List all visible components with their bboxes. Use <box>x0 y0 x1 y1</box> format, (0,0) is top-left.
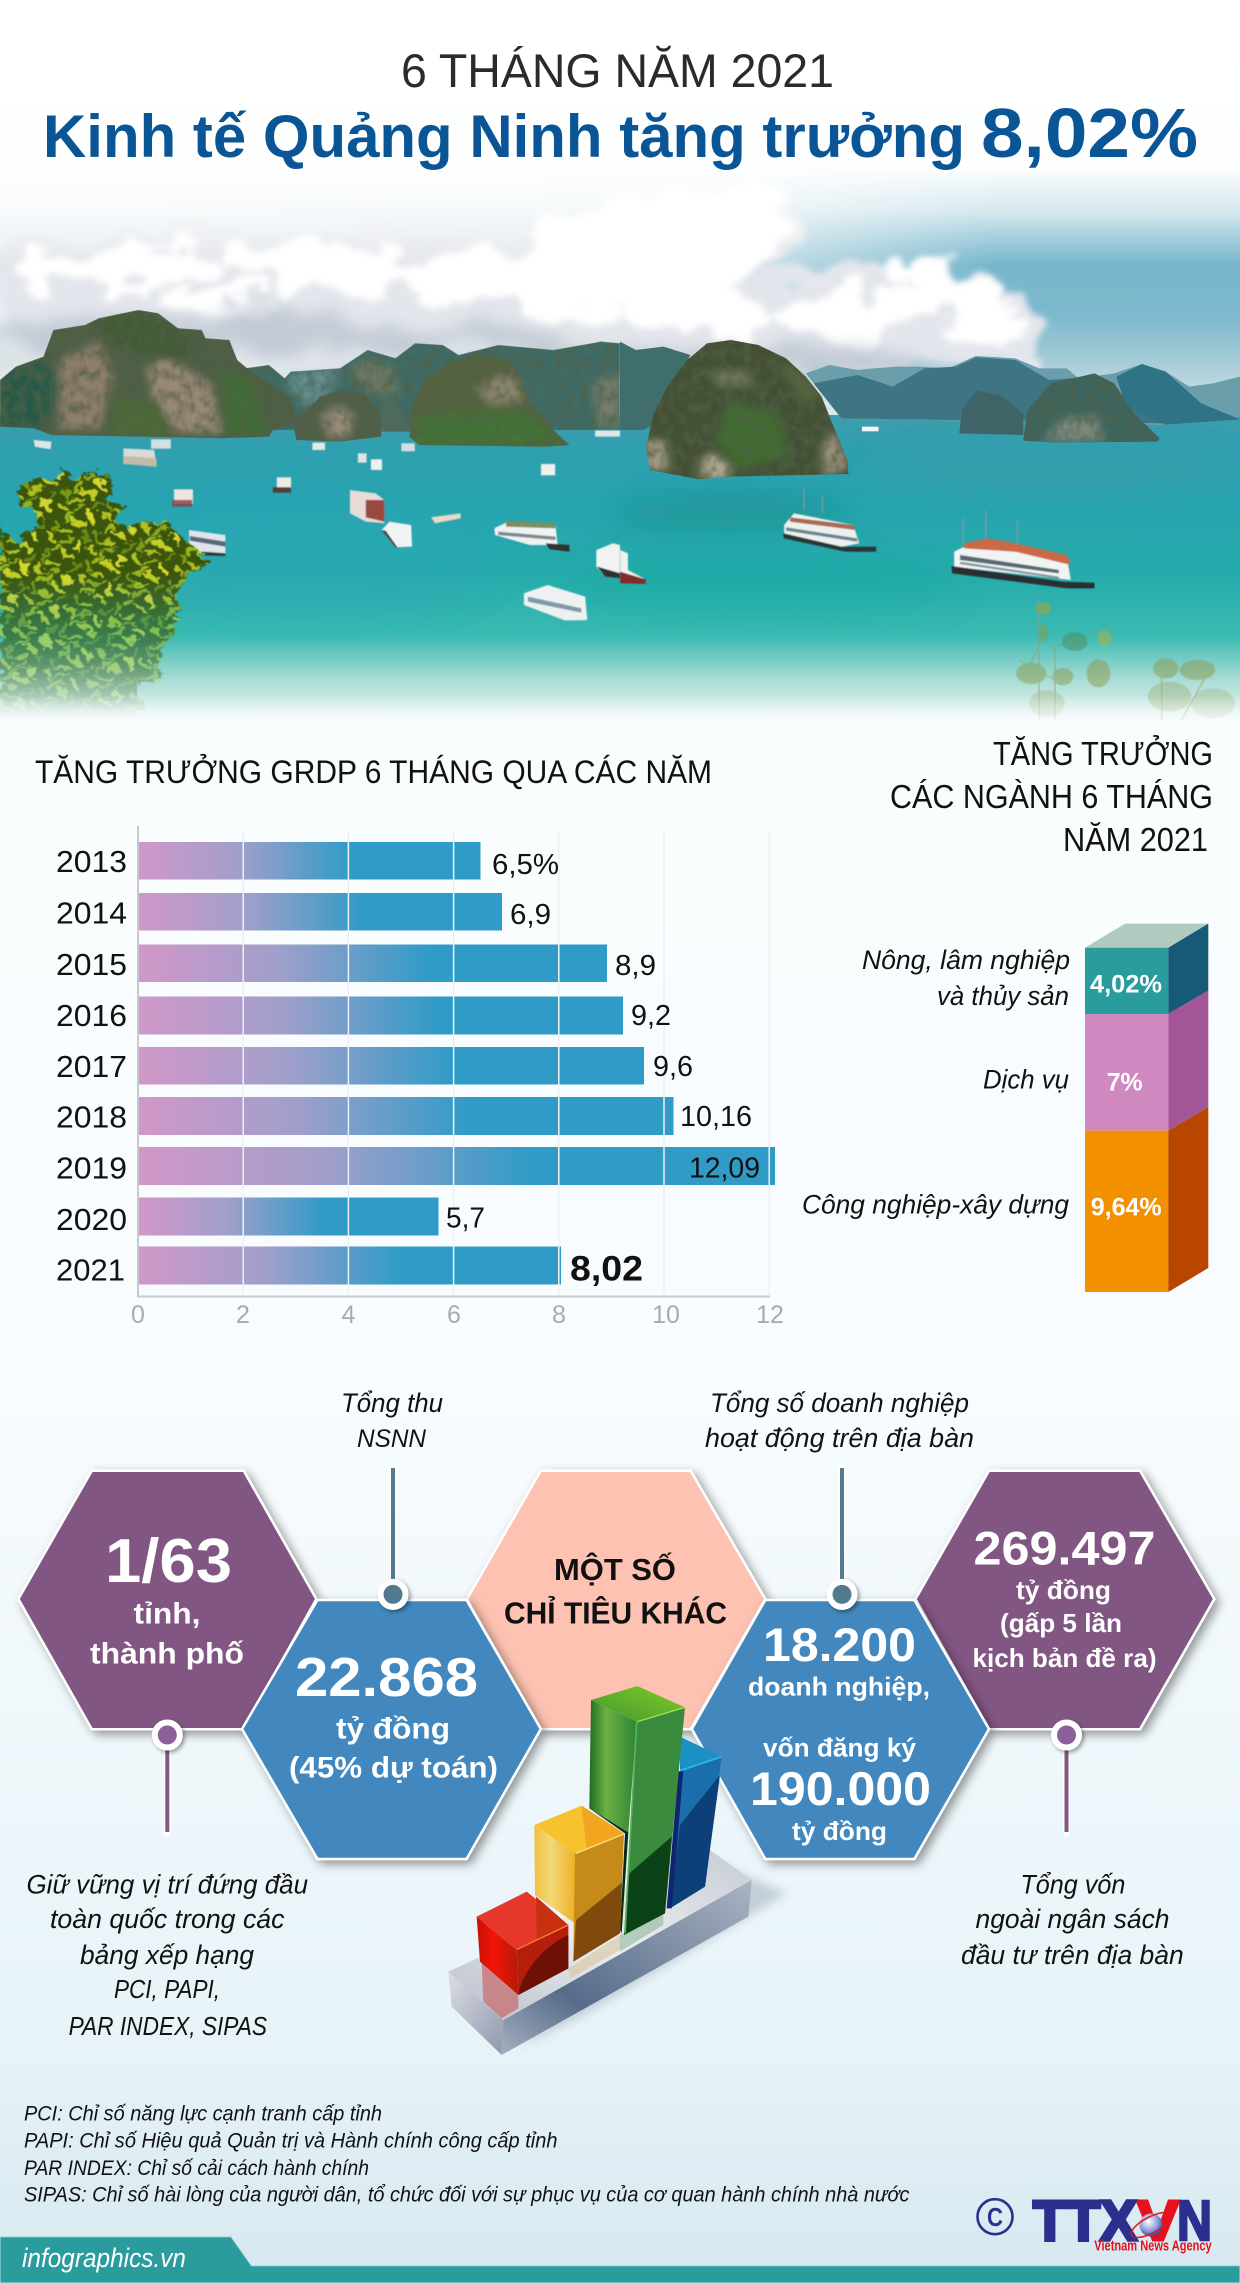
footnotes: SIPAS: Chỉ số hài lòng của người dân, tổ chức đối với sự phục vụ của cơ quan hành chính nhà nước <box>24 2184 910 2207</box>
hexagon: 22.868: (45% dự toán) <box>289 1752 498 1784</box>
islands left <box>0 307 621 448</box>
year labels: 2019 <box>56 1150 127 1186</box>
sector labels: và thủy sản <box>937 981 1069 1011</box>
year labels: 2017 <box>56 1049 127 1084</box>
small island <box>292 390 382 442</box>
heading: sector growth <box>890 735 1213 858</box>
label: ranking: toàn quốc trong các <box>50 1904 285 1934</box>
value labels: 9,2 <box>631 1000 671 1032</box>
value labels: 5,7 <box>446 1202 485 1234</box>
title <box>43 44 1198 172</box>
value labels: 10,16 <box>680 1101 752 1133</box>
hexagon: 18.200: tỷ đồng <box>792 1816 887 1846</box>
title line 2: Kinh tế Quảng Ninh tăng trưởng <box>43 103 965 170</box>
hexagon: 18.200: 18.200 <box>763 1618 916 1671</box>
pin: ranking <box>152 1720 183 1833</box>
label: investment: Tổng vốn <box>1020 1870 1125 1900</box>
small boat far <box>862 427 879 431</box>
hexagon: 1/63: thành phố <box>90 1638 244 1670</box>
left massif <box>0 307 304 440</box>
label: ranking <box>26 1870 308 2041</box>
label: budget revenue: NSNN <box>357 1425 427 1453</box>
hexagon: 22.868: tỷ đồng <box>336 1712 450 1746</box>
photo: Ha Long Bay <box>0 165 1240 730</box>
bar chart: GRDP growth <box>56 826 784 1329</box>
hexagon: 18.200: doanh nghiệp, <box>748 1672 930 1702</box>
islands right <box>620 337 1240 482</box>
label: ranking: PCI, PAPI, <box>114 1974 220 2004</box>
hexagon: one-more indicators title: MỘT SỐ <box>554 1551 676 1587</box>
year labels: 2015 <box>56 947 127 982</box>
hexagon: one-more indicators title: CHỈ TIÊU KHÁC <box>504 1594 727 1630</box>
segment: services: 7% <box>1107 1068 1143 1096</box>
yellow column <box>534 1806 624 1962</box>
axis lines <box>138 826 770 1296</box>
column top <box>1085 924 1208 948</box>
title line 1: 6 THÁNG NĂM 2021 <box>401 44 834 97</box>
segment: industry <box>1085 1107 1208 1292</box>
hexagon: one-more indicators title <box>467 1471 765 1729</box>
footnotes <box>24 2103 910 2207</box>
heading: sector growth: CÁC NGÀNH 6 THÁNG <box>890 778 1213 815</box>
bars <box>138 842 775 1284</box>
red V: V <box>1137 2189 1179 2253</box>
logo: TTXVN: N <box>1177 2189 1212 2253</box>
light sky behind clouds <box>0 165 1240 440</box>
sky <box>0 165 1240 440</box>
back ridge <box>245 340 621 433</box>
value labels: 6,9 <box>510 899 551 931</box>
year labels: 2014 <box>56 896 127 930</box>
value labels <box>446 849 760 1288</box>
x axis labels: 8 <box>552 1301 566 1329</box>
hexagon: 269.497: 269.497 <box>974 1522 1156 1574</box>
label: enterprises <box>705 1388 974 1453</box>
footnotes: PAPI: Chỉ số Hiệu quả Quản trị và Hành chính công cấp tỉnh <box>24 2130 558 2153</box>
label: budget revenue: Tổng thu <box>341 1388 443 1418</box>
x axis labels <box>131 1301 784 1329</box>
clouds <box>0 188 1040 393</box>
heading: sector growth: NĂM 2021 <box>1063 821 1208 858</box>
red column <box>477 1892 568 1995</box>
segment: services <box>1085 991 1208 1131</box>
label: enterprises: Tổng số doanh nghiệp <box>710 1388 969 1418</box>
sector labels: Nông, lâm nghiệp <box>862 945 1070 975</box>
boats <box>34 431 1094 621</box>
hexagon: 1/63 <box>18 1471 316 1729</box>
top fade to white <box>0 165 1240 265</box>
label: ranking: bảng xếp hạng <box>80 1940 254 1970</box>
hexagon: 269.497 <box>916 1471 1214 1729</box>
segment: agriculture: 4,02% <box>1090 970 1162 998</box>
pin: enterprises <box>826 1467 858 1610</box>
label: investment: ngoài ngân sách <box>976 1904 1170 1934</box>
x axis labels: 4 <box>342 1301 356 1329</box>
value labels: 6,5% <box>492 849 559 881</box>
x axis labels: 10 <box>652 1301 680 1329</box>
footer band <box>0 2237 1240 2283</box>
letters: TTX <box>1033 2189 1137 2253</box>
value labels: 8,02 <box>570 1250 643 1288</box>
copyright mark: C <box>987 2202 1003 2232</box>
middle island <box>407 353 573 448</box>
green column <box>589 1686 685 1935</box>
hexagon: 1/63: tỉnh, <box>134 1598 200 1630</box>
year labels <box>56 844 127 1288</box>
copyright mark <box>978 2199 1012 2234</box>
blue column <box>667 1737 722 1908</box>
label: investment <box>961 1870 1184 1970</box>
hexagon: 269.497: (gấp 5 lần <box>1000 1608 1122 1638</box>
x axis labels: 0 <box>131 1301 145 1329</box>
label: enterprises: hoạt động trên địa bàn <box>705 1423 974 1453</box>
website: infographics.vn <box>22 2243 186 2273</box>
icon: 3D bar chart <box>448 1686 787 2055</box>
x axis labels: 2 <box>236 1301 250 1329</box>
year labels: 2016 <box>56 998 127 1033</box>
title value: 8,02% <box>981 94 1198 172</box>
x axis labels: 6 <box>447 1301 461 1329</box>
value labels: 8,9 <box>615 950 656 982</box>
sector labels: Dịch vụ <box>983 1064 1069 1094</box>
label: ranking: Giữ vững vị trí đứng đầu <box>26 1870 308 1900</box>
hexagon: 22.868: 22.868 <box>295 1646 478 1708</box>
water <box>0 415 1240 730</box>
sector labels <box>802 945 1070 1220</box>
stacked 3D column: sectors <box>802 924 1208 1292</box>
hexagon: 22.868 <box>242 1600 541 1859</box>
hexagon: 269.497: kịch bản đề ra) <box>972 1643 1156 1673</box>
footnotes: PAR INDEX: Chỉ số cải cách hành chính <box>24 2157 369 2180</box>
heading: sector growth: TĂNG TRƯỞNG <box>993 735 1213 772</box>
hexagon: 18.200: vốn đăng ký <box>763 1732 917 1762</box>
tree left <box>0 468 208 720</box>
hexagon: 18.200 <box>692 1600 989 1859</box>
hexagon: 269.497: tỷ đồng <box>1016 1575 1111 1605</box>
value labels: 9,6 <box>653 1051 693 1083</box>
x axis labels: 12 <box>756 1301 784 1329</box>
heading: GRDP chart: TĂNG TRƯỞNG GRDP 6 THÁNG QUA CÁC NĂM <box>35 754 712 790</box>
water shading <box>100 452 1240 620</box>
globe <box>1140 2214 1162 2236</box>
logo: TTXVN <box>978 2189 1212 2255</box>
hexagon: 1/63: 1/63 <box>105 1527 232 1596</box>
label: investment: đầu tư trên địa bàn <box>961 1940 1184 1970</box>
segment: industry: 9,64% <box>1091 1194 1162 1222</box>
pin: budget revenue <box>378 1467 408 1610</box>
grid <box>243 831 769 1296</box>
right island <box>1023 374 1160 442</box>
value labels: 12,09 <box>689 1152 760 1184</box>
year labels: 2018 <box>56 1100 127 1134</box>
label: budget revenue <box>341 1388 443 1453</box>
big island <box>642 337 851 482</box>
footnotes: PCI: Chỉ số năng lực cạnh tranh cấp tỉnh <box>24 2103 382 2126</box>
sector labels: Công nghiệp-xây dựng <box>802 1190 1069 1220</box>
tree right <box>1016 600 1235 720</box>
label: ranking: PAR INDEX, SIPAS <box>69 2011 268 2041</box>
year labels: 2021 <box>56 1252 125 1288</box>
bottom fade <box>0 695 1240 730</box>
year labels: 2013 <box>56 844 127 879</box>
segment: agriculture <box>1085 924 1208 1014</box>
hexagon: 18.200: 190.000 <box>750 1762 931 1815</box>
pin: investment <box>1051 1720 1082 1833</box>
year labels: 2020 <box>56 1202 127 1237</box>
